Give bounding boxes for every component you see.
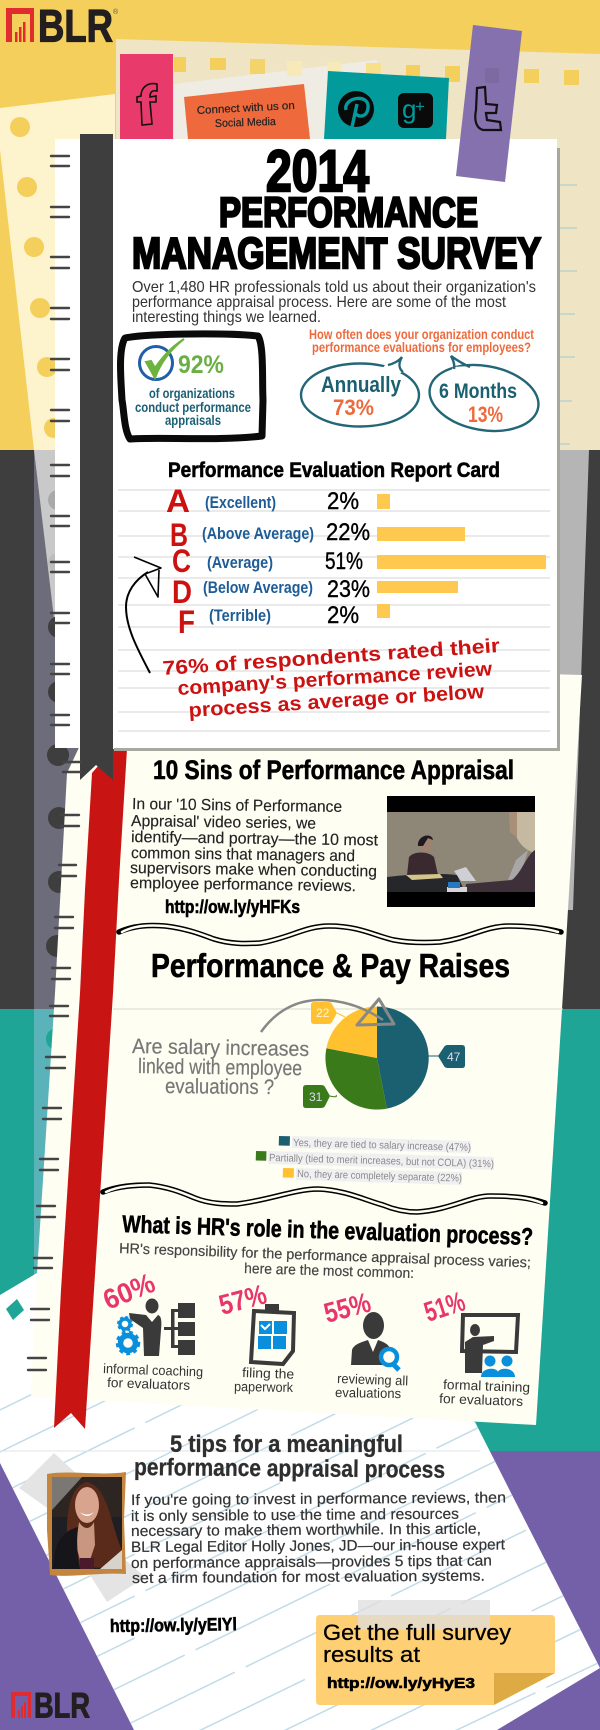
- pie chart: [303, 1002, 465, 1110]
- report card labels: (Terrible): [209, 607, 271, 625]
- tips heading: [134, 1431, 445, 1484]
- salary question: [132, 1035, 309, 1099]
- stat: 55 percent reviewing: evaluations: [335, 1385, 401, 1401]
- HR role subtitle: HR's responsibility for the performance appraisal process varies;: [119, 1241, 531, 1271]
- intro text: interesting things we learned.: [132, 309, 321, 326]
- photo of Holly Jones: [19, 1453, 145, 1602]
- sins text: common sins that managers and: [131, 845, 355, 865]
- evaluation frequency question: How often does your organization conduct: [309, 327, 534, 342]
- sticky note: [316, 1600, 555, 1705]
- icon: clipboard: [251, 1304, 294, 1364]
- stat: 51 percent formal training: 51%: [420, 1286, 469, 1328]
- tips body text: on performance appraisals—provides 5 tips that can: [131, 1552, 492, 1572]
- icon: google plus: g: [402, 94, 416, 124]
- fold seam: [113, 1008, 563, 1010]
- red callout 76 percent: [162, 635, 501, 722]
- sins text: supervisors make when conducting: [130, 860, 377, 880]
- stat: 57 percent filing: [216, 1278, 294, 1395]
- report card percentages: 2%: [327, 602, 359, 629]
- stat: 55 percent reviewing: [321, 1287, 408, 1401]
- tips body text: If you're going to invest in performance reviews, then: [131, 1489, 506, 1509]
- bubble: 6 months: 6 Months: [439, 380, 517, 403]
- stat: 60 percent informal coaching: informal coaching: [103, 1361, 203, 1379]
- back paper top right: [116, 39, 600, 910]
- facebook tab: [120, 54, 173, 139]
- title: PERFORMANCE: [219, 188, 478, 236]
- tips body text: it is only sensible to use the time and resources: [131, 1506, 459, 1525]
- salary question: linked with employee: [138, 1055, 302, 1080]
- icon: reviewer: [351, 1312, 399, 1370]
- orange connect card: [184, 84, 310, 139]
- pie legend: Yes, they are tied to salary increase (47%): [293, 1137, 471, 1154]
- pie legend: Partially (tied to merit increases, but not COLA) (31%): [269, 1152, 494, 1170]
- twitter tab: [456, 25, 522, 182]
- icon: google plus: +: [415, 97, 425, 116]
- tag 47: 47: [447, 1050, 461, 1064]
- intro text: Over 1,480 HR professionals told us about their organization's: [132, 279, 536, 296]
- BLR logo bottom: BLR: [34, 1686, 90, 1726]
- sins text: employee performance reviews.: [130, 875, 356, 895]
- tag 22: 22: [316, 1006, 330, 1020]
- bottom lined paper: [0, 1273, 600, 1730]
- report card percentages: 23%: [327, 576, 370, 603]
- stat: 51 percent formal training: [420, 1286, 530, 1409]
- bubble: annually: Annually: [321, 372, 402, 397]
- 92 percent callout: of organizations: [149, 386, 235, 401]
- 92 percent callout: 92%: [178, 351, 224, 379]
- sticky note: http://ow.ly/yHyE3: [327, 1675, 475, 1692]
- icon: coaching: [117, 1298, 195, 1356]
- report card heading: Performance Evaluation Report Card: [168, 459, 500, 482]
- BLR logo top: ®: [113, 8, 119, 16]
- pie legend: [256, 1136, 494, 1185]
- bubble: annually: 73%: [333, 395, 374, 420]
- BLR logo bottom: [11, 1686, 90, 1726]
- pie legend: No, they are completely separate (22%): [297, 1168, 462, 1185]
- report card percentages: [325, 488, 370, 629]
- report card grades: A: [166, 483, 190, 519]
- wavy divider 1: [119, 926, 561, 944]
- red callout 76 percent: process as average or below: [188, 681, 485, 722]
- report card grades: D: [172, 574, 192, 610]
- sins text: In our '10 Sins of Performance: [132, 796, 342, 816]
- report card grades: B: [170, 517, 188, 553]
- red ribbon: [54, 749, 127, 1429]
- tips body text: set a firm foundation for most evaluation systems.: [132, 1568, 485, 1587]
- video still: [387, 796, 535, 907]
- report card labels: (Excellent): [205, 494, 276, 512]
- bubble: 6 months: [424, 356, 544, 439]
- tag 31: 31: [309, 1090, 323, 1104]
- dark spine bookmark: [80, 134, 113, 780]
- BLR logo top: [6, 0, 119, 52]
- bubble: 6 months: 13%: [468, 402, 503, 427]
- report card labels: (Below Average): [203, 579, 313, 597]
- red callout 76 percent: company's performance review: [177, 658, 493, 700]
- salary question: evaluations ?: [165, 1075, 274, 1099]
- report card grades: F: [178, 604, 195, 640]
- left notebook page: [0, 94, 115, 1277]
- sticky note: results at: [323, 1642, 420, 1667]
- salary question: Are salary increases: [132, 1035, 309, 1061]
- tips heading: 5 tips for a meaningful: [170, 1431, 403, 1458]
- icon: google plus: [398, 93, 433, 128]
- tips body text: necessary to make them worthwhile. In this article,: [131, 1521, 481, 1540]
- stat: 57 percent filing: paperwork: [234, 1379, 293, 1395]
- cream main paper: [31, 673, 582, 1425]
- gray arrow to pie: [261, 999, 394, 1032]
- sins heading: 10 Sins of Performance Appraisal: [153, 755, 514, 785]
- tips body text: BLR Legal Editor Holly Jones, JD—our in-house expert: [131, 1536, 506, 1556]
- report card labels: [202, 494, 314, 625]
- teal social tab: [324, 71, 449, 139]
- orange connect card: Connect with us on: [197, 100, 295, 117]
- stat: 57 percent filing: 57%: [216, 1278, 270, 1321]
- tips body text: [131, 1489, 506, 1587]
- tag 31: [303, 1085, 336, 1108]
- report card ruled lines and bars: [118, 490, 550, 731]
- report card percentages: 2%: [327, 488, 359, 515]
- woman right: [447, 812, 535, 892]
- white notebook page: [55, 139, 560, 751]
- evaluation frequency question: performance evaluations for employees?: [312, 340, 531, 355]
- report card grades: [166, 483, 195, 640]
- stat: 55 percent reviewing: reviewing all: [337, 1371, 408, 1388]
- red callout 76 percent: 76% of respondents rated their: [162, 635, 501, 680]
- report card grades: C: [172, 543, 191, 579]
- tag 47: [428, 1045, 465, 1068]
- icon: trainer: [462, 1315, 518, 1377]
- 92 percent callout: [120, 334, 263, 439]
- teal diamond: [6, 1299, 24, 1320]
- wavy divider 2: [103, 1185, 545, 1212]
- title: [132, 139, 541, 278]
- evaluation frequency question: [309, 327, 534, 355]
- icon: check circle: [140, 339, 184, 380]
- arrow to grade C: [126, 557, 161, 673]
- tips heading: performance appraisal process: [134, 1454, 445, 1484]
- stat: 51 percent formal training: for evaluators: [439, 1391, 524, 1409]
- report card percentages: 22%: [326, 519, 370, 546]
- BLR logo top: BLR: [38, 0, 113, 52]
- stat: 57 percent filing: filing the: [242, 1365, 294, 1382]
- sticky note: Get the full survey: [323, 1620, 511, 1645]
- stat: 55 percent reviewing: 55%: [321, 1287, 374, 1329]
- sins link: http://ow.ly/yHFKs: [165, 897, 300, 917]
- HR role subtitle: here are the most common:: [244, 1261, 414, 1282]
- report card percentages: 51%: [325, 548, 363, 575]
- title: 2014: [266, 139, 369, 204]
- stat: 51 percent formal training: formal training: [443, 1377, 530, 1395]
- tips link: http://ow.ly/yEIYl: [110, 1614, 237, 1636]
- 92 percent callout: conduct performance: [135, 400, 251, 415]
- binding rings: [28, 156, 81, 1370]
- sins text: Appraisal' video series, we: [131, 813, 316, 833]
- stat: 60 percent informal coaching: [99, 1267, 203, 1393]
- bubble: annually: [301, 357, 419, 426]
- icon: pinterest: [338, 91, 374, 127]
- report card labels: (Above Average): [202, 525, 314, 543]
- sins text: identify—and portray—the 10 most: [131, 829, 379, 849]
- intro text: [132, 279, 536, 326]
- pay raises heading: Performance & Pay Raises: [151, 947, 510, 984]
- stat: 60 percent informal coaching: 60%: [99, 1267, 159, 1316]
- tag 22: [311, 1002, 345, 1024]
- woman left: [406, 835, 443, 880]
- 92 percent callout: appraisals: [165, 413, 221, 428]
- report card labels: (Average): [207, 554, 273, 572]
- stat: 60 percent informal coaching: for evaluators: [107, 1375, 191, 1393]
- sins text: [130, 796, 379, 895]
- orange connect card: Social Media: [215, 116, 277, 130]
- intro text: performance appraisal process. Here are some of the most: [132, 294, 506, 311]
